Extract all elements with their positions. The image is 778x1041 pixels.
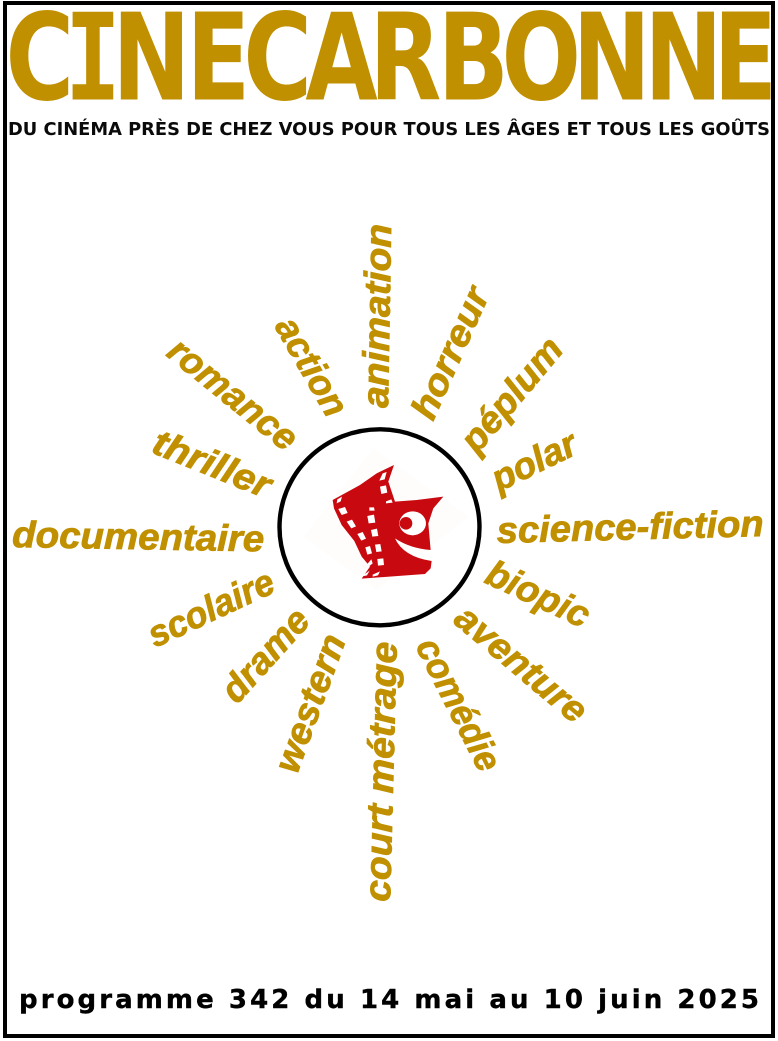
word: western: western <box>266 628 354 778</box>
word: court métrage: court métrage <box>357 641 405 902</box>
genre words sunburst <box>12 223 764 902</box>
word: aventure: aventure <box>447 597 596 731</box>
word: scolaire: scolaire <box>141 561 281 655</box>
word: drame: drame <box>212 600 318 710</box>
word: science-fiction: science-fiction <box>496 503 764 551</box>
word: horreur: horreur <box>403 278 498 425</box>
word: action: action <box>267 310 357 424</box>
word: romance: romance <box>160 329 306 459</box>
word: comédie: comédie <box>408 631 510 778</box>
footer: programme dates: programme 342 du 14 mai au 10 juin 2025 <box>19 985 759 1015</box>
word: thriller: thriller <box>147 421 280 507</box>
subtitle: DU CINÉMA PRÈS DE CHEZ VOUS POUR TOUS LES ÂGES ET TOUS LES GOÛTS <box>8 118 770 140</box>
central circle <box>280 429 480 625</box>
icon: film strip face logo <box>303 448 468 590</box>
word: péplum: péplum <box>451 329 571 461</box>
word: biopic: biopic <box>480 552 597 636</box>
word: documentaire: documentaire <box>12 514 265 559</box>
word: animation: animation <box>355 223 399 408</box>
word: polar: polar <box>484 422 586 500</box>
